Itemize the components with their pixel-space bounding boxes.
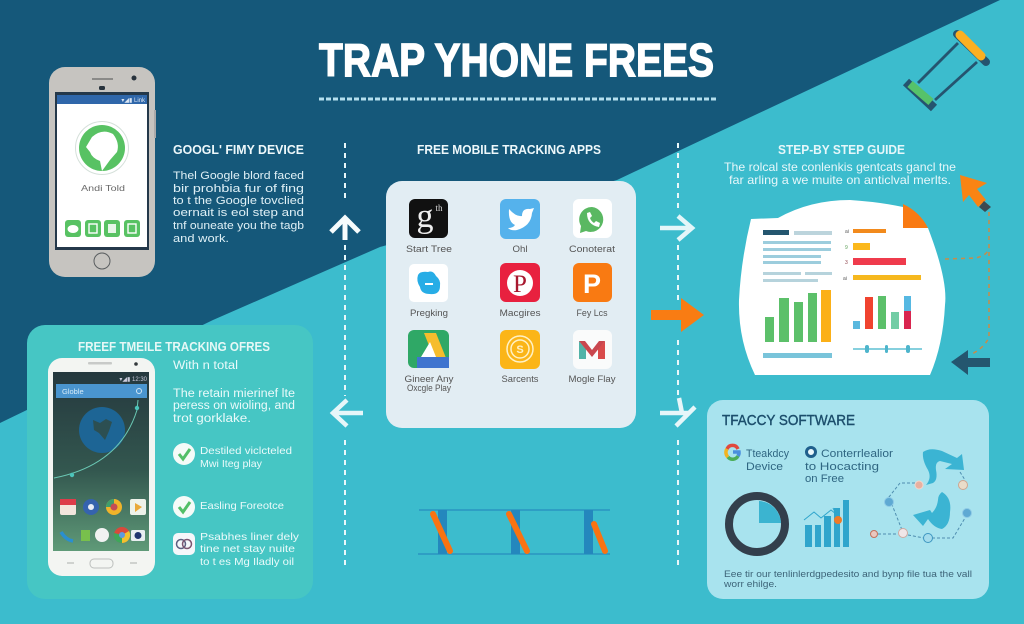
heading: free mobile tracking apps: FREE MOBILE TRACKING APPS bbox=[417, 143, 601, 157]
icon: check two bbox=[173, 496, 195, 518]
text block: google description: tnf ouneate you the tagb bbox=[173, 220, 304, 232]
text: tracky footer bbox=[723, 569, 972, 590]
text: contentrealior: to Hocacting bbox=[805, 461, 879, 473]
app icon: pinterest orange: P bbox=[583, 269, 601, 299]
text: tracky footer: worr ehilge. bbox=[723, 579, 777, 590]
arrow: left lower bbox=[333, 400, 363, 426]
text block: step guide description: The rolcal ste conlenkis gentcats gancl tne bbox=[724, 160, 956, 174]
icon: ladder bottom centre bbox=[418, 510, 610, 554]
icon: phone white screen: ▾◢▮ Link bbox=[121, 98, 146, 104]
text: feature three: to t es Mg Iladly oil bbox=[200, 556, 294, 568]
text block: google description: and work. bbox=[173, 233, 229, 245]
text block: google description: bir prohbia fur of fing bbox=[173, 183, 304, 195]
heading: google find my device: GOOGL' FIMY DEVICE bbox=[173, 143, 304, 157]
horizontal bar chart: ai bbox=[843, 276, 847, 282]
text: feature one bbox=[200, 445, 292, 470]
horizontal bar chart: 9 bbox=[845, 245, 848, 251]
text: tracky device: Tteakdcy bbox=[746, 448, 789, 460]
app icon: g: g bbox=[416, 198, 434, 235]
horizontal bar chart: ai bbox=[845, 229, 849, 235]
icon: google g bbox=[726, 445, 739, 459]
icon: phone white screen: Andi Told bbox=[81, 184, 125, 193]
arrow: up bbox=[331, 218, 359, 240]
app icon: g: th bbox=[435, 203, 443, 213]
horizontal bar chart bbox=[843, 229, 921, 282]
app icon: pinterest red bbox=[500, 263, 541, 318]
text block: google description: oernait is eol step and bbox=[173, 207, 304, 219]
text block: offers intro: trot gorklake. bbox=[173, 413, 251, 425]
app icon: twitter: Ohl bbox=[512, 244, 528, 254]
icon: android phone: Globle bbox=[62, 387, 84, 396]
chart: donut bbox=[729, 496, 785, 552]
app icon: drive: Oxcgle Play bbox=[407, 383, 451, 393]
panel: report document bbox=[739, 200, 945, 375]
icon: app badge bbox=[173, 533, 195, 555]
text: feature one: Mwi Iteg play bbox=[200, 458, 263, 470]
text: feature three: tine net stay nuite bbox=[200, 543, 295, 555]
bar chart: multicolour bbox=[853, 296, 911, 329]
arrow: orange centre bbox=[651, 298, 704, 332]
app icon: gmail: Mogle Flay bbox=[568, 374, 616, 384]
app icon: pinterest red: P bbox=[513, 271, 527, 298]
text: feature one: Destiled viclcteled bbox=[200, 445, 292, 457]
panel: free mobile tracking offers bbox=[27, 325, 313, 599]
app icon: twitter bbox=[500, 199, 540, 254]
heading: tracky software: TFACCY SOFTWARE bbox=[722, 412, 855, 429]
text block: offers intro: peress on wioling, and bbox=[173, 400, 295, 412]
icon: android phone: ▾◢▮ 12:30 bbox=[119, 377, 148, 383]
text: contentrealior: on Free bbox=[805, 473, 844, 485]
text block: google description bbox=[173, 170, 304, 245]
text block: google description: Thel Google blord faced bbox=[173, 170, 304, 182]
arrow: dark left bbox=[951, 350, 990, 375]
horizontal bar chart: 3 bbox=[845, 260, 848, 266]
app icon: yellow coin: S bbox=[516, 344, 524, 356]
app icon: whatsapp bbox=[569, 199, 616, 254]
text: tracky device: Device bbox=[746, 461, 783, 473]
diagram: network with arrows bbox=[870, 449, 972, 542]
text: feature three bbox=[200, 531, 300, 568]
app icon: g: Start Tree bbox=[406, 244, 452, 254]
text block: offers intro: With n total bbox=[173, 360, 238, 372]
icon: check one bbox=[173, 443, 195, 465]
text block: offers intro: The retain mierinef lte bbox=[173, 388, 295, 400]
icon: android phone bbox=[48, 358, 155, 576]
arrow: right lower bbox=[660, 398, 695, 426]
text block: step guide description bbox=[724, 160, 956, 187]
title: TRAP YHONE FREES bbox=[319, 34, 714, 86]
icon: ladder gadget top right bbox=[906, 34, 986, 108]
text: feature three: Psabhes liner dely bbox=[200, 531, 300, 543]
arrow: dashed connectors bbox=[945, 212, 989, 354]
app icon: yellow coin: Sarcents bbox=[502, 374, 539, 384]
text: tracky footer: Eee tir our tenlinlerdgpedesito and bynp file tua the vall bbox=[724, 569, 972, 580]
slider bbox=[853, 345, 922, 353]
panel: apps grid bbox=[386, 181, 636, 428]
text: feature two: Easling Foreotce bbox=[200, 500, 284, 512]
icon: phone white screen bbox=[49, 67, 156, 277]
app icon: gmail bbox=[568, 330, 616, 384]
heading: free mobile tracking: FREEF TMEILE TRACKING OFRES bbox=[78, 339, 270, 354]
chart: bars with trend bbox=[804, 500, 849, 547]
app icon: yellow coin bbox=[500, 330, 540, 384]
app icon: pinterest orange bbox=[573, 263, 612, 318]
text block: google description: to t the Google tovclied bbox=[173, 195, 304, 207]
bar chart: green bbox=[765, 290, 831, 342]
arrow: orange up-left bbox=[960, 175, 991, 212]
arrow: right upper bbox=[660, 216, 692, 240]
heading: step by step guide: STEP-BY STEP GUIDE bbox=[778, 143, 905, 157]
text: contentrealior bbox=[805, 448, 893, 485]
app icon: drive bbox=[404, 330, 454, 393]
app icon: whatsapp: Conoterat bbox=[569, 244, 616, 254]
text block: step guide description: far arling a we muite on anticlval merlts. bbox=[729, 173, 951, 187]
text block: offers intro bbox=[173, 360, 295, 425]
app icon: pinterest orange: Fey Lcs bbox=[576, 308, 608, 318]
text: tracky device bbox=[746, 448, 789, 473]
panel: google find my device bbox=[49, 67, 304, 277]
app icon: pinterest red: Macgires bbox=[500, 308, 541, 318]
dashed column dividers bbox=[345, 143, 678, 570]
app icon: drive: Gineer Any bbox=[404, 374, 454, 384]
app icon: g bbox=[406, 198, 452, 254]
app icon: blue cloud: Pregking bbox=[410, 308, 448, 318]
icon: ring bullet bbox=[806, 448, 816, 456]
text lines bbox=[763, 230, 832, 358]
app icon: blue cloud bbox=[409, 264, 448, 318]
text: contentrealior: Conterrlealior bbox=[821, 448, 893, 460]
icon: folded corner bbox=[903, 204, 928, 228]
panel: tracky software bbox=[707, 400, 989, 599]
